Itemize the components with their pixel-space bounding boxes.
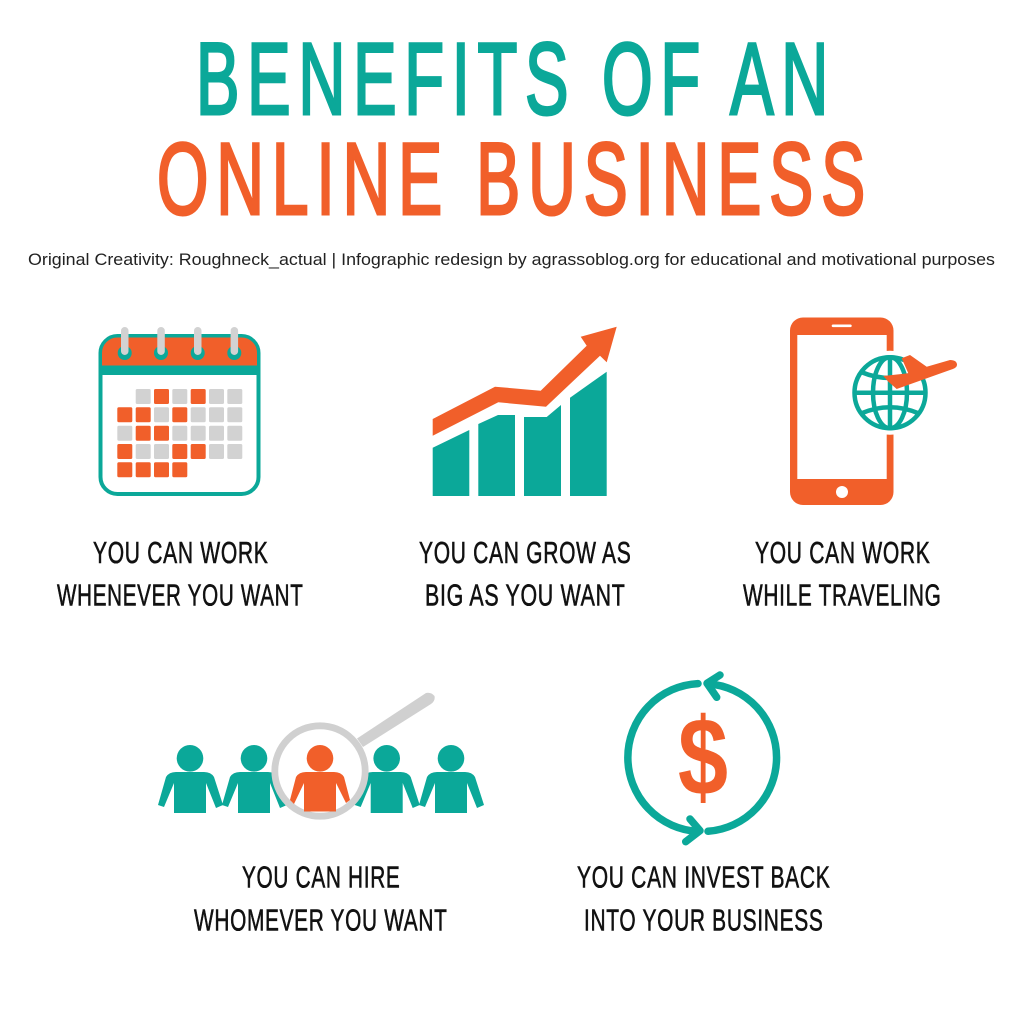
caption: work whenever: YOU CAN WORK <box>93 536 268 570</box>
icon: phone with globe and plane <box>790 318 957 505</box>
caption: invest back: YOU CAN INVEST BACK <box>577 860 830 894</box>
caption: work while traveling <box>743 536 942 612</box>
caption: work whenever <box>57 536 304 612</box>
icon: growth chart <box>433 327 617 496</box>
caption: work while traveling: YOU CAN WORK <box>755 536 930 570</box>
caption: grow as big <box>419 536 632 612</box>
caption: invest back <box>577 860 830 938</box>
caption: grow as big: BIG AS YOU WANT <box>425 578 626 612</box>
icon: calendar <box>99 327 260 494</box>
icon: dollar cycle <box>628 675 777 842</box>
title <box>157 22 873 236</box>
credit line: Original Creativity: Roughneck_actual | Infographic redesign by agrassoblog.org for educational and motivational purposes <box>28 250 995 269</box>
caption: work whenever: WHENEVER YOU WANT <box>57 578 304 612</box>
caption: hire whomever: WHOMEVER YOU WANT <box>194 904 448 938</box>
caption: invest back: INTO YOUR BUSINESS <box>584 904 824 938</box>
icon: dollar cycle: $ <box>678 697 728 819</box>
caption: grow as big: YOU CAN GROW AS <box>419 536 632 570</box>
caption: hire whomever: YOU CAN HIRE <box>242 860 400 894</box>
caption: hire whomever <box>194 860 448 938</box>
icon: people under magnifier <box>158 693 484 816</box>
